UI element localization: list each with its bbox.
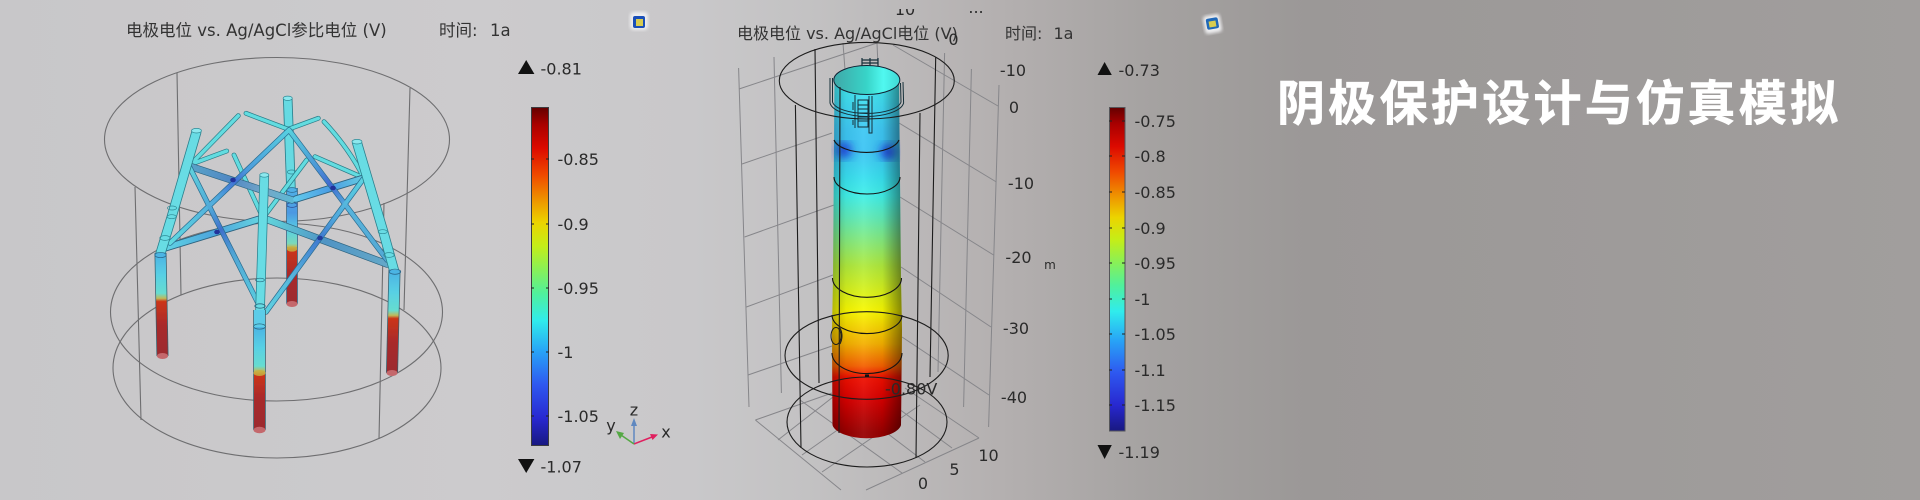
axis triad: x (661, 422, 671, 442)
colour bar tick labels: jacket: -1 (558, 343, 573, 362)
colour bar tick labels: jacket: -1.05 (558, 407, 599, 426)
heading: 阴极保护设计与仿真模拟 (1277, 78, 1841, 131)
time label: jacket: 1a (490, 21, 511, 40)
axis triad: z (630, 400, 638, 420)
z axis tick labels: 0 (948, 30, 959, 49)
time label: jacket: 时间: (439, 21, 478, 40)
z axis tick labels: -10 (1008, 174, 1034, 193)
legend max marker (518, 60, 582, 78)
z axis tick labels: -10 (1000, 61, 1026, 80)
colour bar tick labels: tower: -0.85 (1134, 183, 1176, 202)
z axis tick labels: -40 (1001, 388, 1027, 407)
legend min marker (1098, 443, 1160, 462)
floor axis tick labels (918, 446, 999, 493)
upper thin braces (189, 113, 364, 218)
grey 3D axis grid (739, 43, 999, 490)
z axis tick labels (948, 30, 1056, 407)
floor axis tick labels: 10 (978, 446, 999, 465)
colour bar tick labels: tower: -1 (1134, 290, 1150, 309)
callout label: -0.80V: -0.80V (885, 380, 937, 398)
z axis tick labels: -20 (1005, 248, 1032, 267)
floor axis tick labels: 5 (949, 460, 960, 479)
colour bar tick labels: jacket: -0.95 (558, 279, 599, 298)
legend min marker (518, 458, 582, 476)
icon: software logo left (630, 12, 648, 30)
front leg (254, 173, 269, 433)
colour bar: tower (1109, 108, 1125, 431)
left leg (155, 128, 202, 359)
back leg (283, 96, 298, 307)
right leg (352, 139, 401, 376)
colour bar tick labels: jacket: -0.85 (558, 150, 599, 169)
z axis tick labels: 0 (1009, 98, 1019, 117)
legend min marker: -1.19 (1118, 443, 1160, 462)
colour bar: jacket (531, 108, 549, 446)
legend max marker (1098, 61, 1160, 80)
time label: tower: 1a (1054, 24, 1073, 43)
legend min marker: -1.07 (540, 458, 582, 476)
colour bar tick labels: tower: -0.8 (1134, 147, 1166, 166)
colour bar tick labels: tower: -1.1 (1134, 361, 1166, 380)
z axis tick labels: -30 (1003, 319, 1029, 338)
colour bar tick labels: tower: -0.9 (1134, 219, 1166, 238)
section rings (832, 140, 902, 374)
z axis tick labels: m (1044, 258, 1056, 272)
tower opening (834, 66, 900, 94)
legend max marker: -0.81 (540, 60, 582, 78)
icon: software logo right (1203, 14, 1222, 34)
colour bar tick labels: tower: -0.95 (1134, 254, 1176, 273)
clipped top axis labels (895, 0, 984, 19)
panel title: tower potential: 电极电位 vs. Ag/AgCl电位 (V) (737, 24, 958, 43)
panel title: jacket potential: 电极电位 vs. Ag/AgCl参比电位 (V) (126, 21, 387, 40)
low potential blotches (837, 142, 895, 160)
colour bar tick labels: tower: -1.15 (1134, 396, 1176, 415)
horizontal braces (165, 166, 387, 264)
time label: tower: 时间: (1005, 24, 1042, 43)
platform railing and ladder (830, 58, 904, 133)
colour bar tick labels: tower: -1.05 (1134, 325, 1176, 344)
axis triad (606, 400, 671, 444)
colour bar tick labels: tower: -0.75 (1134, 112, 1176, 131)
clipped top axis labels: 10 (895, 0, 915, 19)
colour bar tick labels: tower (1134, 112, 1176, 415)
legend max marker: -0.73 (1118, 61, 1160, 80)
3D model: jacket structure with potential colouring (155, 96, 401, 433)
domain cylinder wireframe: jacket (104, 58, 450, 458)
panel: monopile tower simulation (737, 0, 1222, 493)
panel: jacket platform simulation (104, 12, 671, 476)
floor axis tick labels: 0 (918, 474, 928, 493)
monopile tower with potential colouring (832, 66, 902, 438)
black domain cylinder wireframe: tower (779, 42, 954, 467)
colour bar tick labels: jacket: -0.9 (558, 215, 589, 234)
axis triad: y (606, 416, 616, 435)
anode details on tower (831, 328, 869, 377)
colour bar tick labels: jacket (558, 150, 599, 426)
diagonal braces (170, 130, 387, 312)
